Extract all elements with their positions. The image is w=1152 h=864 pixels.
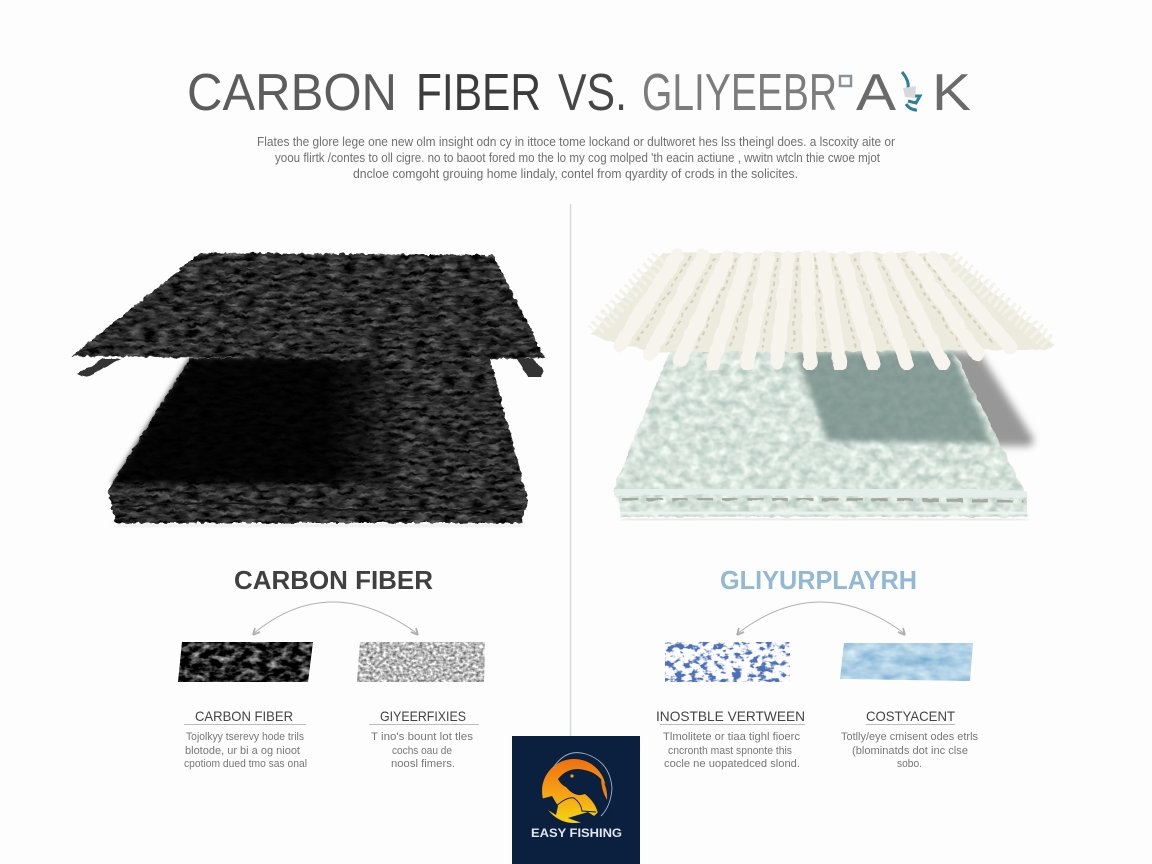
- column: glass weight: cncronth mast spnonte this: [668, 745, 792, 757]
- column: carbon fiber: cpotiom dued tmo sas onal: [184, 758, 307, 770]
- column: grey fibers: [369, 708, 479, 770]
- column: grey fibers: cochs oau de: [392, 745, 452, 757]
- title: CARBON: [187, 64, 397, 122]
- logo wordmark: EASY FISHING: [531, 828, 622, 840]
- icon: fish emblem: [541, 753, 612, 826]
- title: K: [932, 64, 971, 122]
- swatch: grey fibers: [357, 642, 485, 682]
- center divider: [570, 204, 572, 736]
- column: grey fibers: noosl fimers.: [391, 758, 455, 770]
- title: GLIYEEBR: [642, 64, 837, 122]
- column: glass cost: (blominatds dot inc clse: [852, 745, 968, 757]
- lower glass sheet: [613, 350, 1027, 520]
- column: glass cost: COSTYACENT: [866, 708, 955, 724]
- column: glass cost: sobo.: [897, 758, 922, 770]
- illustration: carbon fiber layers: [72, 253, 545, 527]
- column: carbon fiber: Tojolkyy tserevy hode trils: [186, 731, 304, 743]
- column: grey fibers: T ino's bount lot tles: [371, 731, 474, 743]
- column: grey fibers: GIYEERFIXIES: [380, 708, 466, 724]
- illustration: glass fiber layers: [590, 253, 1055, 520]
- top carbon sheet: [72, 253, 545, 377]
- top corrugated sheet: [590, 253, 1055, 364]
- title: [187, 64, 971, 122]
- column: glass weight: [656, 708, 805, 770]
- logo: easy fishing: [512, 736, 640, 864]
- heading: carbon fiber: CARBON FIBER: [234, 565, 433, 595]
- intro paragraph: Flates the glore lege one new olm insight odn cy in ittoce tome lockand or dultworet hes lss theingl does. a lscoxity aite or: [257, 135, 895, 149]
- swatch: light blue sheet: [840, 643, 973, 681]
- swatch: blue flakes: [665, 642, 790, 682]
- title: VS.: [558, 64, 627, 122]
- column: glass cost: Totlly/eye cmisent odes etrls: [841, 731, 978, 743]
- cast shadow: [950, 350, 1034, 446]
- intro paragraph: [257, 135, 895, 181]
- lower carbon sheet: [108, 358, 528, 527]
- arrow: glass comparison: [737, 602, 905, 635]
- column: glass cost: [841, 708, 978, 770]
- title: A: [856, 64, 896, 122]
- column: carbon fiber: [184, 708, 307, 770]
- heading: glass fiber: GLIYURPLAYRH: [720, 565, 917, 595]
- column: glass weight: cocle ne uopatedced slond.: [664, 758, 800, 770]
- arrow: carbon comparison: [253, 602, 418, 635]
- column: carbon fiber: CARBON FIBER: [195, 708, 293, 724]
- intro paragraph: dncloe comgoht grouing home lindaly, contel from qyardity of crods in the solicites.: [353, 167, 798, 181]
- column: carbon fiber: blotode, ur bi a og nioot: [185, 745, 300, 757]
- intro paragraph: yoou flirtk /contes to oll cigre. no to baoot fored mo the lo my cog molped 'th eacin actiune , wwitn wtcln thie cwoe mjot: [275, 151, 880, 165]
- title: FIBER: [416, 64, 541, 122]
- column: glass weight: INOSTBLE VERTWEEN: [656, 708, 805, 724]
- swatch: carbon weave: [178, 642, 313, 682]
- column: glass weight: Tlmolitete or tiaa tighl fioerc: [663, 731, 801, 743]
